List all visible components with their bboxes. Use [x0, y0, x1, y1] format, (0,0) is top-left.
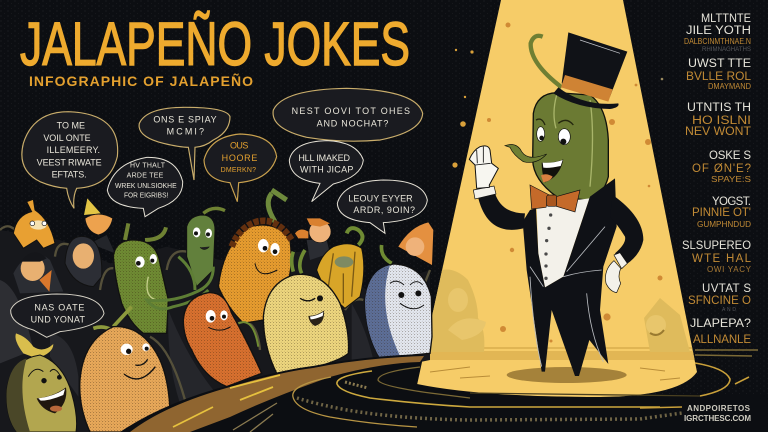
block 7: SFNCINE O [688, 295, 751, 307]
bubble: hy that: ARDE TEE [127, 172, 164, 179]
block 4 [692, 150, 751, 184]
mustache nose [505, 145, 547, 162]
bubble: to me: TO ME [57, 121, 85, 131]
jalapeno magician [469, 32, 643, 383]
audience: cream winking pepper [263, 250, 349, 373]
bubble: ous hoore: OUS [230, 141, 248, 151]
block 5: YOGST. [712, 196, 751, 208]
block 6 [682, 240, 752, 274]
block 6: WTE HAL [692, 253, 752, 265]
audience [0, 190, 433, 432]
block 4: SPAYE:S [711, 175, 751, 184]
block 1: DALBCINMTHNAE.N [684, 37, 751, 46]
eyes [536, 119, 573, 145]
spotlight beam [410, 0, 700, 397]
block 8: JLAPEPA? [690, 318, 751, 330]
shadow [507, 367, 627, 383]
bubble: nas oate: NAS OATE [34, 303, 84, 313]
bubble: nas oate [11, 294, 104, 337]
block 1 [684, 13, 751, 53]
footer credit: ANDPOIRETOS [687, 404, 751, 413]
bubble: nest: NEST OOVI TOT OHES [292, 106, 410, 116]
block 5: PINNIE OT' [692, 207, 751, 219]
bubble: to me: EFTATS. [52, 170, 87, 180]
audience: tan pepper [80, 307, 170, 432]
mouth [541, 159, 563, 182]
audience: olive pepper [6, 333, 77, 432]
bubble: nest: AND NOCHAT? [317, 118, 388, 128]
stage rings [233, 367, 700, 432]
block 4: OSKE S [709, 150, 751, 162]
footer credit [684, 404, 751, 423]
bubble: hy that: FOR EIGRIBS! [124, 192, 168, 199]
bubble: to me: VEEST RIWATE [37, 158, 102, 168]
block 7 [688, 283, 751, 313]
block 2: UWST TTE [688, 58, 751, 70]
bubble: to me [22, 112, 118, 208]
body [533, 93, 608, 200]
block 5: GUMPHNDUD [697, 220, 751, 229]
block 2 [686, 58, 752, 91]
audience: child right [295, 218, 331, 260]
block 2: BVLLE ROL [686, 71, 752, 83]
right hand [605, 253, 627, 293]
block 6: SLSUPEREO [682, 240, 751, 252]
block 5 [692, 196, 751, 229]
audience: orange chick [13, 199, 55, 248]
audience: small green pepper [147, 208, 225, 309]
tuxedo jacket [523, 178, 617, 376]
seats [0, 226, 430, 432]
footer credit: IGRCTHESC.COM [684, 414, 751, 423]
stage [120, 350, 768, 432]
left arm [478, 193, 525, 230]
audience: yellow hat person [84, 198, 115, 253]
block 1: MLTTNTE [701, 13, 751, 25]
bubble: all imaked [289, 141, 363, 202]
right arm [610, 195, 643, 267]
bubble: nas oate: UND YONAT [31, 315, 85, 325]
subtitle: INFOGRAPHIC OF JALAPEÑO [29, 72, 253, 89]
bubble: nest [273, 88, 423, 141]
audience: blue white pepper [365, 245, 432, 358]
audience: striped pumpkin [317, 228, 364, 308]
audience: orange curly pepper [218, 190, 292, 323]
block 4: OF ØN'E? [692, 163, 751, 175]
stage scribbles [297, 398, 682, 420]
block 1: JILE YOTH [686, 25, 751, 37]
stage floor [120, 354, 768, 432]
speech bubbles [22, 88, 427, 233]
block 2: DMAYMAND [708, 82, 751, 91]
stage lines right [640, 363, 749, 408]
right column text [682, 13, 752, 423]
block 3: NEV WONT [685, 126, 751, 138]
audience: hooded person [65, 236, 102, 287]
block 7: UVTAT S [702, 283, 751, 295]
bubble: ous hoore [204, 134, 277, 202]
bubble: hy that [107, 157, 183, 217]
top hat [553, 32, 627, 109]
stem [531, 36, 562, 87]
bubble: all imaked: WITH JICAP [300, 165, 353, 175]
audience: dark person left [13, 252, 63, 293]
bubble: leouy: LEOUY EYYER [348, 194, 413, 204]
block 7: AND [722, 307, 736, 313]
block 8: ALLNANLE [693, 334, 751, 346]
bubble: ous hoore: DMERKN? [221, 167, 256, 174]
block 6: OWI YACY [707, 265, 752, 274]
stage wooden rim [130, 356, 424, 432]
ghost audience left [430, 270, 486, 352]
block 1: RHIMNAGHATHS [702, 47, 751, 53]
ghost audience right [644, 298, 690, 352]
block 3 [685, 102, 751, 138]
bubble: ons e spiay: ONS E SPIAY [153, 114, 217, 124]
title: JALAPEÑO JOKES [20, 10, 410, 78]
block 3: UTNTIS TH [687, 102, 751, 114]
bubble: ons e spiay: MCMI? [167, 126, 204, 136]
spotlight dust specks [452, 22, 663, 342]
block 8 [690, 318, 751, 346]
white shirt [537, 198, 589, 287]
left cuff [473, 186, 496, 199]
block 3: HO ISLNI [692, 115, 751, 127]
bubble: hy that: HV THALT [130, 162, 166, 169]
bubble: to me: VOIL ONTE [43, 133, 91, 143]
audience: child far right [398, 222, 433, 265]
bubble: ous hoore: HOORE [222, 153, 257, 163]
left glove [469, 146, 498, 188]
bubble: to me: ILLEMEERY. [47, 145, 100, 155]
bubble: all imaked: HLL IMAKED [298, 153, 350, 163]
bubble: hy that: WREK UNLSIOKHE [115, 183, 177, 190]
audience: green pepper [113, 223, 168, 333]
rim highlights [173, 375, 280, 427]
audience: red orange pepper [183, 293, 262, 387]
bubble: ons e spiay [139, 107, 230, 180]
bow tie [530, 185, 580, 212]
bubble: leouy [337, 180, 427, 233]
bubble: leouy: ARDR, 9OIN? [353, 205, 415, 215]
